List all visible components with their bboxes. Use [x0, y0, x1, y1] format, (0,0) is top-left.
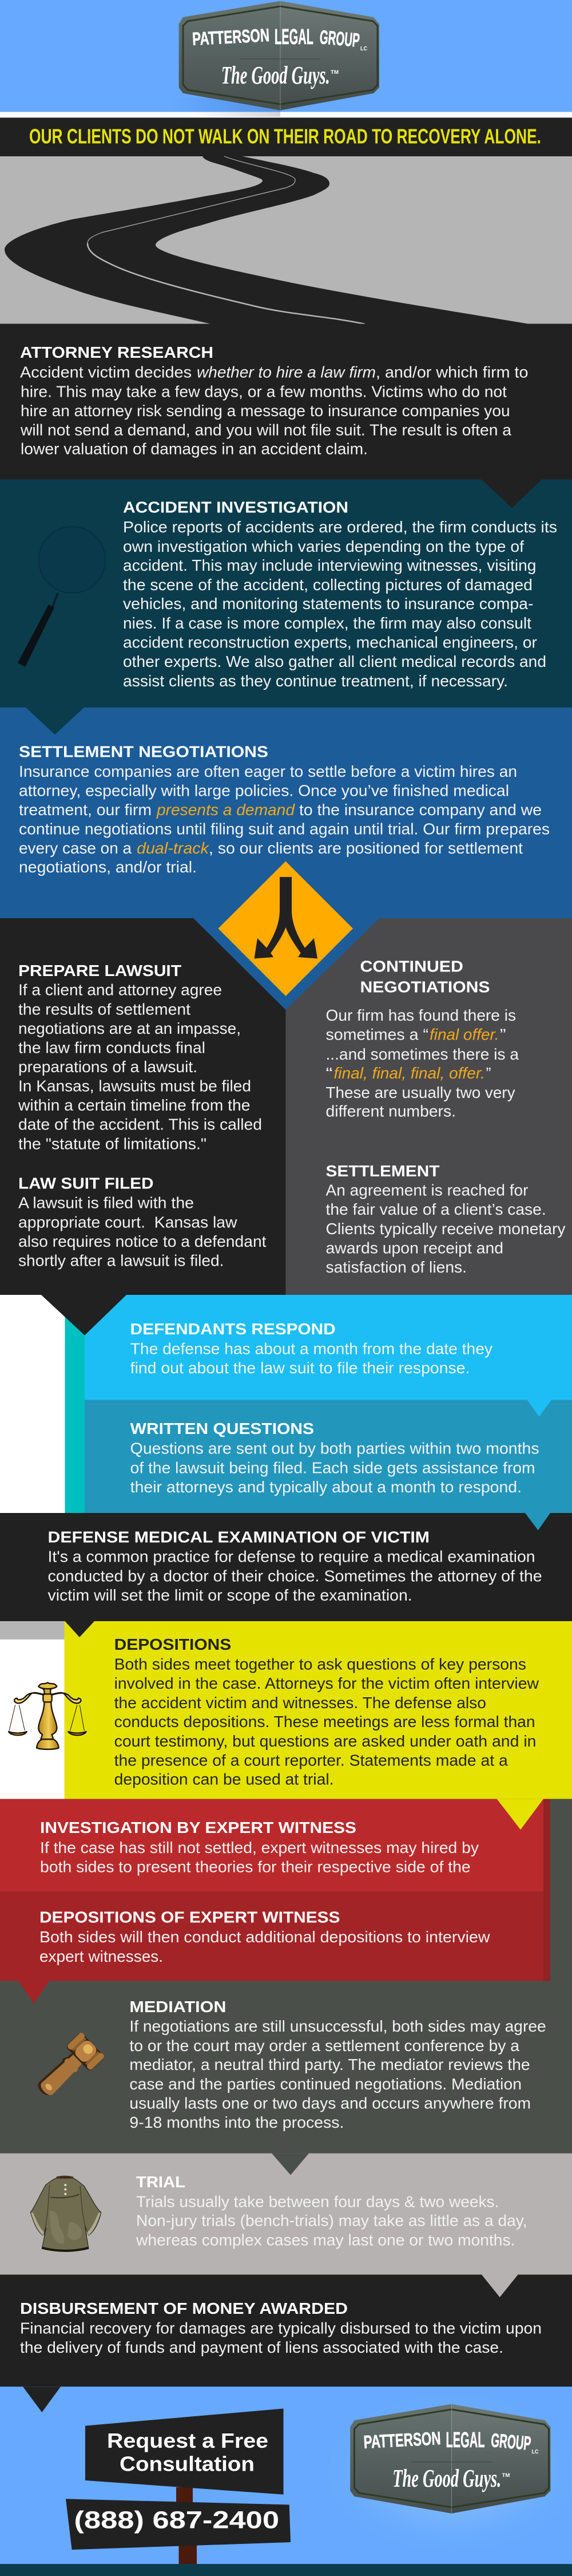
- panel: disbursement of money awarded: the delivery of funds and payment of liens associated with the case.: [20, 2338, 503, 2356]
- panel: continued negotiations and settlement: These are usually two very: [326, 1084, 515, 1101]
- panel: accident investigation: assist clients as they continue treatment, if necessary.: [123, 672, 508, 690]
- panel: investigation by expert witness: INVESTIGATION BY EXPERT WITNESS: [40, 1819, 356, 1836]
- panel: written questions: WRITTEN QUESTIONS: [130, 1420, 314, 1437]
- pointer from disbursement: [23, 2387, 61, 2412]
- sign: request a free consultation: Request a Free: [107, 2429, 268, 2452]
- logo: Patterson Legal Group badge, footer: The Good Guys.: [392, 2464, 501, 2492]
- panel: continued negotiations and settlement: ”: [500, 1026, 506, 1044]
- panel: prepare lawsuit and law suit filed: negotiations are at an impasse,: [18, 1020, 241, 1037]
- icon: magnifying glass: [18, 527, 105, 667]
- logo: Patterson Legal Group badge, footer: [350, 2404, 550, 2514]
- panel: prepare lawsuit and law suit filed: appropriate court. Kansas law: [18, 1213, 237, 1231]
- panel: trial: TRIAL: [136, 2173, 185, 2191]
- panel: mediation: to or the court may order a settlement conference by a: [129, 2037, 520, 2055]
- panel: continued negotiations and settlement: awards upon receipt and: [326, 1239, 503, 1257]
- logo: Patterson Legal Group badge: The Good Guys.: [221, 61, 330, 89]
- pointer from defense medical examination: [65, 1621, 94, 1637]
- panel: depositions of expert witness: Both sides will then conduct additional depositions to interview: [39, 1928, 490, 1946]
- panel: continued negotiations and settlement: satisfaction of liens.: [326, 1258, 467, 1276]
- panel: continued negotiations and settlement: SETTLEMENT: [326, 1162, 439, 1180]
- panel: attorney research: whether to hire a law firm: [197, 364, 376, 381]
- pointer from attorney research: [482, 480, 542, 508]
- panel: settlement negotiations: dual-track: [137, 839, 209, 857]
- panel: mediation: mediator, a neutral third party. The mediator reviews the: [129, 2056, 530, 2073]
- panel: accident investigation: other experts. We also gather all client medical records and: [123, 653, 546, 670]
- panel: prepare lawsuit and law suit filed: the results of settlement: [18, 1000, 190, 1018]
- panel: prepare lawsuit and law suit filed: In Kansas, lawsuits must be filed: [18, 1077, 251, 1095]
- panel: trial: [0, 2154, 572, 2275]
- logo: Patterson Legal Group badge, footer: PATTERSON: [363, 2428, 441, 2452]
- panel: depositions: the accident victim and witnesses. The defense also: [114, 1694, 486, 1712]
- panel: prepare lawsuit and law suit filed: the "statute of limitations.": [18, 1135, 206, 1153]
- logo: Patterson Legal Group badge, footer: GROUP: [490, 2429, 532, 2455]
- panel: continued negotiations and settlement: ...and sometimes there is a: [326, 1045, 519, 1063]
- panel: investigation by expert witness: If the case has still not settled, expert witnesses may hired by: [40, 1839, 479, 1856]
- panel: accident investigation: the scene of the accident, collecting pictures of damaged: [123, 576, 533, 594]
- panel: depositions of expert witness: [0, 1891, 543, 1981]
- panel: attorney research: [0, 324, 572, 480]
- panel: settlement negotiations: [0, 708, 572, 1011]
- panel: continued negotiations and settlement: the fair value of a client’s case.: [326, 1200, 546, 1218]
- panel: attorney research: , and/or which firm to: [376, 364, 529, 381]
- panel: prepare lawsuit and law suit filed: also requires notice to a defendant: [18, 1232, 267, 1250]
- panel: accident investigation: nies. If a case is more complex, the firm may also consult: [123, 614, 531, 632]
- panel: settlement negotiations: continue negotiations until filing suit and again until trial. Our firm prepares: [19, 820, 550, 838]
- panel: defense medical examination: DEFENSE MEDICAL EXAMINATION OF VICTIM: [48, 1528, 430, 1546]
- pointer from defendants respond: [527, 1400, 551, 1417]
- icon: diamond fork sign: [218, 861, 353, 996]
- panel: prepare lawsuit and law suit filed: shortly after a lawsuit is filed.: [18, 1252, 224, 1270]
- icon: judge robe: [30, 2176, 101, 2251]
- panel: settlement negotiations: presents a demand: [156, 801, 296, 819]
- panel: settlement negotiations: Insurance companies are often eager to settle before a victim hires an: [19, 762, 517, 780]
- panel: investigation by expert witness: [0, 1799, 572, 1981]
- panel: written questions: [85, 1400, 572, 1513]
- panel: prepare lawsuit and law suit filed: If a client and attorney agree: [18, 981, 222, 999]
- pointer from depositions: [497, 1799, 543, 1830]
- panel: settlement negotiations: negotiations, and/or trial.: [19, 858, 197, 876]
- panel: continued negotiations and settlement: ”: [486, 1064, 491, 1082]
- logo: Patterson Legal Group badge: TM: [331, 69, 339, 75]
- panel: accident investigation: own investigation which varies depending on the type of: [123, 538, 524, 555]
- panel: defendants respond: DEFENDANTS RESPOND: [130, 1320, 336, 1338]
- panel: settlement negotiations: , so our clients are positioned for settlement: [209, 839, 523, 857]
- panel: settlement negotiations: every case on a: [19, 839, 132, 857]
- panel: trial: Trials usually take between four days & two weeks.: [136, 2192, 499, 2210]
- panel: prepare lawsuit and law suit filed: within a certain timeline from the: [18, 1096, 250, 1114]
- panel: defense medical examination: It's a common practice for defense to require a medical examination: [48, 1548, 535, 1566]
- panel: attorney research: lower valuation of damages in an accident claim.: [21, 440, 368, 458]
- panel: trial: whereas complex cases may last one or two months.: [136, 2231, 515, 2249]
- pointer from depositions of expert witness: [18, 1981, 49, 2004]
- panel: disbursement of money awarded: Financial recovery for damages are typically disbursed to the victim upon: [20, 2319, 542, 2337]
- panel: prepare lawsuit and law suit filed: PREPARE LAWSUIT: [18, 962, 181, 979]
- panel: settlement negotiations: SETTLEMENT NEGOTIATIONS: [19, 742, 268, 760]
- panel: settlement negotiations: to the insurance company and we: [299, 801, 542, 819]
- logo: Patterson Legal Group badge, footer: TM: [502, 2472, 510, 2478]
- panel: continued negotiations and settlement: An agreement is reached for: [326, 1182, 529, 1199]
- panel: continued negotiations and settlement: Our firm has found there is: [326, 1006, 516, 1024]
- pointer from lawsuit panel: [41, 1295, 126, 1336]
- panel: continued negotiations and settlement: CONTINUED: [360, 957, 463, 975]
- panel: depositions: conducts depositions. These meetings are less formal than: [114, 1713, 535, 1730]
- panel: continued negotiations and settlement: Clients typically receive monetary: [326, 1220, 566, 1238]
- panel: depositions: involved in the case. Attorneys for the victim often interview: [114, 1674, 539, 1692]
- panel: continued negotiations and settlement: final offer.: [430, 1026, 499, 1044]
- panel: mediation: MEDIATION: [129, 1998, 226, 2016]
- panel: written questions: their attorneys and typically about a month to respond.: [130, 1478, 522, 1496]
- panel: prepare lawsuit and law suit filed: A lawsuit is filed with the: [18, 1194, 194, 1212]
- logo: Patterson Legal Group badge: LC: [360, 46, 367, 52]
- logo: Patterson Legal Group badge, footer: LEGAL: [446, 2428, 485, 2452]
- panel: defendants respond: The defense has about a month from the date they: [130, 1340, 492, 1358]
- panel: mediation: usually lasts one or two days and occurs anywhere from: [129, 2095, 531, 2112]
- panel: depositions: Both sides meet together to ask questions of key persons: [114, 1655, 526, 1673]
- panel: mediation: case and the parties continued negotiations. Mediation: [129, 2075, 522, 2093]
- panel: attorney research: ATTORNEY RESEARCH: [20, 343, 213, 361]
- panel: written questions: Questions are sent out by both parties within two months: [130, 1440, 539, 1457]
- panel: continued negotiations and settlement: different numbers.: [326, 1102, 456, 1120]
- panel: written questions: of the lawsuit being filed. Each side gets assistance from: [130, 1459, 535, 1476]
- panel: mediation: If negotiations are still unsuccessful, both sides may agree: [129, 2017, 546, 2035]
- panel: mediation: [0, 1981, 572, 2154]
- panel: settlement negotiations: attorney, especially with large policies. Once you’ve finished medical: [19, 782, 509, 799]
- panel: depositions: DEPOSITIONS: [114, 1635, 231, 1653]
- logo: Patterson Legal Group badge: GROUP: [319, 26, 360, 52]
- panel: defense medical examination: victim will set the limit or scope of the examination.: [48, 1586, 412, 1604]
- icon: scales of justice: [9, 1682, 86, 1749]
- panel: depositions: court testimony, but questions are asked under oath and in: [114, 1732, 537, 1750]
- panel: accident investigation: [0, 480, 572, 708]
- pointer from trial: [482, 2275, 518, 2297]
- panel: trial: Non-jury trials (bench-trials) may take as little as a day,: [136, 2212, 527, 2230]
- panel: accident investigation: ACCIDENT INVESTIGATION: [123, 499, 348, 516]
- panel: attorney research: will not send a demand, and you will not file suit. The result is often a: [20, 421, 512, 439]
- panel: attorney research: Accident victim decides: [20, 364, 192, 381]
- sign: phone number: [66, 2499, 291, 2550]
- panel: settlement negotiations: treatment, our firm: [19, 801, 152, 819]
- panel: continued negotiations and settlement: final, final, final, offer.: [334, 1064, 485, 1082]
- panel: prepare lawsuit and law suit filed: the law firm conducts final: [18, 1039, 205, 1057]
- panel: depositions: the presence of a court reporter. Statements made at a: [114, 1751, 509, 1769]
- panel: defendants respond: [0, 1295, 572, 1513]
- sign post: [176, 2487, 197, 2564]
- panel: attorney research: hire. This may take a few days, or a few months. Victims who do not: [21, 382, 507, 400]
- panel: depositions of expert witness: expert witnesses.: [39, 1947, 163, 1965]
- panel: accident investigation: accident reconstruction experts, mechanical engineers, or: [123, 633, 537, 651]
- logo: Patterson Legal Group badge, footer: LC: [532, 2449, 539, 2455]
- logo: Patterson Legal Group badge: LEGAL: [275, 25, 313, 49]
- panel: prepare lawsuit and law suit filed: [0, 918, 285, 1295]
- panel: defendants respond: find out about the law suit to file their response.: [130, 1359, 470, 1377]
- panel: depositions: [0, 1621, 572, 1799]
- tagline banner: [0, 118, 572, 157]
- panel: accident investigation: vehicles, and monitoring statements to insurance compa-: [123, 595, 533, 613]
- panel: accident investigation: accident. This may include interviewing witnesses, visiting: [123, 556, 537, 574]
- panel: disbursement of money awarded: DISBURSEMENT OF MONEY AWARDED: [20, 2300, 348, 2317]
- logo: Patterson Legal Group badge: PATTERSON: [192, 25, 270, 49]
- panel: header: [0, 0, 572, 118]
- panel: defense medical examination: conducted by a doctor of their choice. Sometimes the attorney of the: [48, 1567, 542, 1585]
- panel: depositions: deposition can be used at trial.: [114, 1771, 334, 1788]
- panel: prepare lawsuit and law suit filed: LAW SUIT FILED: [18, 1175, 153, 1192]
- panel: defense medical examination: [0, 1513, 572, 1621]
- sign: request a free consultation: Consultation: [120, 2452, 255, 2475]
- panel: investigation by expert witness: both sides to present theories for their respective side of the: [40, 1858, 471, 1875]
- logo: Patterson Legal Group badge: [179, 1, 379, 110]
- panel: continued negotiations and settlement: sometimes a “: [326, 1026, 428, 1044]
- road illustration: [0, 156, 572, 324]
- pointer from accident investigation: [26, 708, 84, 734]
- sign: request a free consultation: [85, 2409, 284, 2495]
- panel: attorney research: hire an attorney risk sending a message to insurance companies you: [21, 402, 510, 420]
- panel: disbursement of money awarded: [0, 2275, 572, 2387]
- panel: footer call to action: [0, 2387, 572, 2576]
- panel: prepare lawsuit and law suit filed: date of the accident. This is called: [18, 1116, 262, 1133]
- panel: continued negotiations and settlement: [285, 918, 572, 1295]
- panel: mediation: 9-18 months into the process.: [129, 2113, 344, 2131]
- pointer from mediation: [272, 2154, 309, 2175]
- pointer from written questions: [525, 1513, 550, 1530]
- panel: continued negotiations and settlement: NEGOTIATIONS: [360, 978, 490, 995]
- sign: phone number: (888) 687-2400: [74, 2506, 279, 2534]
- panel: continued negotiations and settlement: “: [326, 1064, 333, 1082]
- panel: accident investigation: Police reports of accidents are ordered, the firm conducts its: [123, 518, 557, 536]
- panel: depositions of expert witness: DEPOSITIONS OF EXPERT WITNESS: [39, 1909, 340, 1926]
- icon: gavel: [30, 2032, 105, 2106]
- panel: prepare lawsuit and law suit filed: preparations of a lawsuit.: [18, 1058, 197, 1076]
